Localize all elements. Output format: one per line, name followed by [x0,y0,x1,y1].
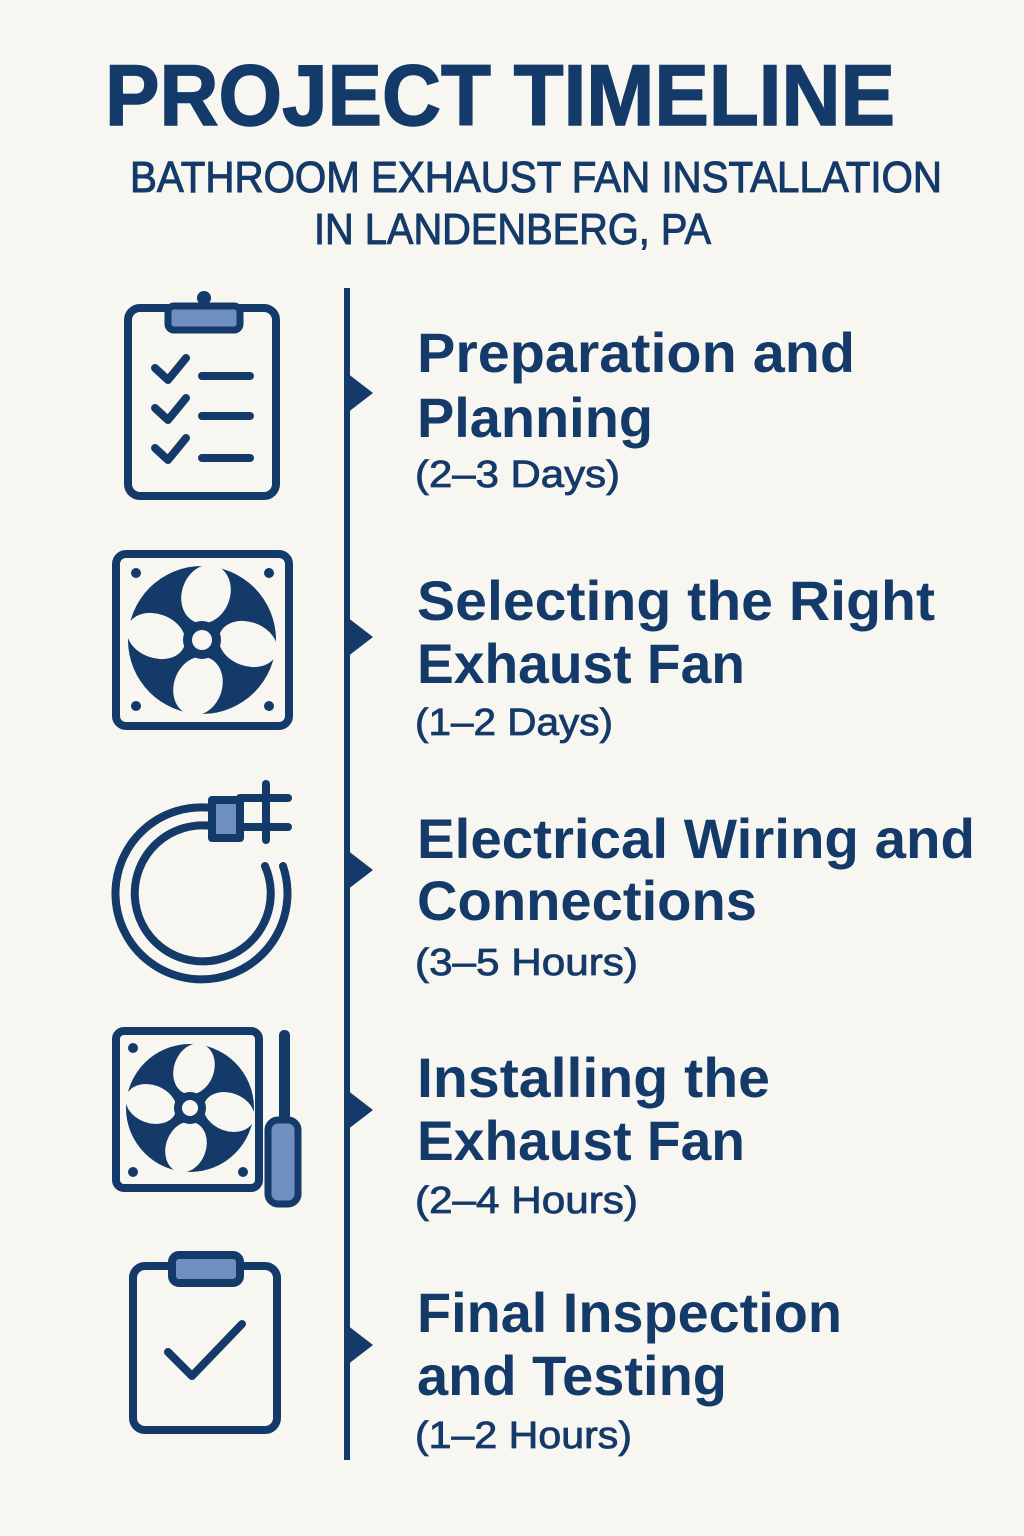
step 3 text: (3–5 Hours) [415,942,638,984]
step 4 text: Installing the [417,1046,770,1109]
step 2 text: Exhaust Fan [417,632,745,695]
icon: fan with screwdriver [116,1030,298,1204]
step 4 text: (2–4 Hours) [415,1180,638,1222]
step 1 text [415,321,855,496]
icon: inspection clipboard [133,1255,277,1430]
timeline line with markers [344,288,373,1460]
step 2 text [415,569,935,744]
step 5 text: (1–2 Hours) [415,1415,632,1457]
step 1 text: (2–3 Days) [415,454,620,496]
subtitle: BATHROOM EXHAUST FAN INSTALLATION [130,153,942,202]
step 4 text: Exhaust Fan [417,1109,745,1172]
step 2 text: Selecting the Right [417,569,935,632]
step 2 text: (1–2 Days) [415,702,613,744]
title: PROJECT TIMELINE [105,48,895,144]
step 1 text: Planning [417,386,653,449]
step 5 text [415,1281,842,1457]
step 5 text: Final Inspection [417,1281,842,1344]
step 5 text: and Testing [417,1344,727,1407]
step 3 text: Connections [417,869,757,932]
step 4 text [415,1046,770,1222]
subtitle: IN LANDENBERG, PA [314,205,712,254]
icon: checklist clipboard [128,291,276,496]
subtitle [130,153,942,254]
step 3 text [415,807,975,984]
icon: exhaust fan [116,554,289,726]
icon: electrical plug and cord [115,784,288,979]
step 1 text: Preparation and [417,321,855,384]
step 3 text: Electrical Wiring and [417,807,975,870]
